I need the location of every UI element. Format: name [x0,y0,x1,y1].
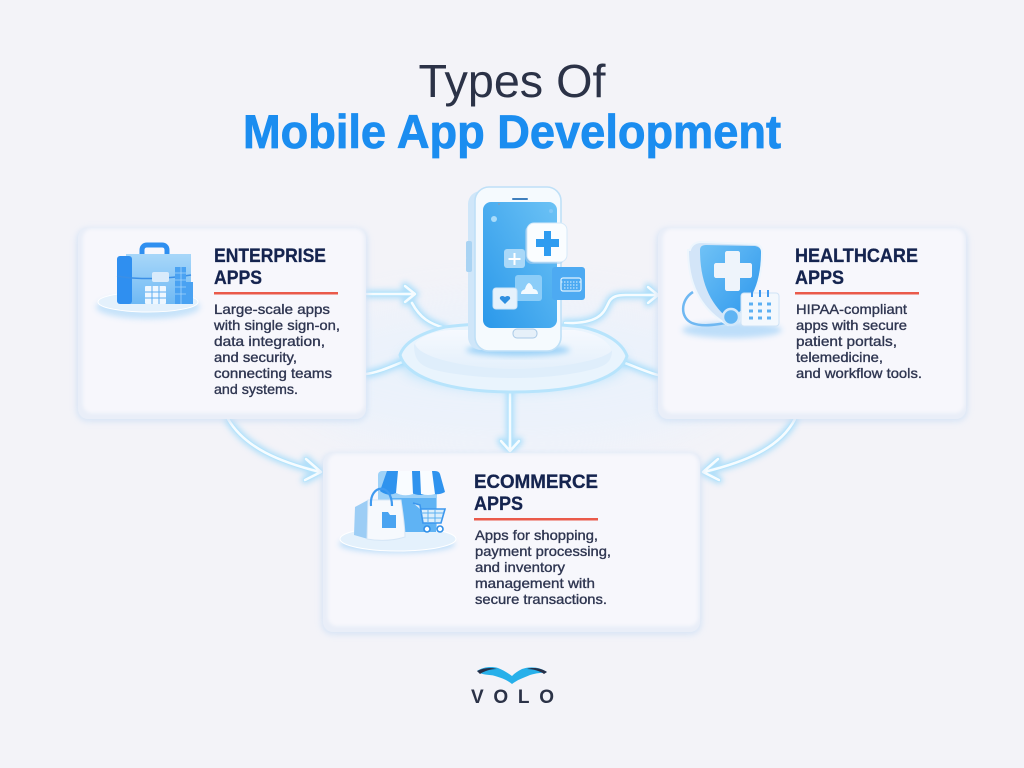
title line: Types Of: Types Of [418,55,606,107]
icon: smartphone [466,187,585,351]
body text: connecting teams [214,365,332,381]
body text: and workflow tools. [796,365,922,381]
body text: Apps for shopping, [475,527,598,543]
panel: enterprise apps [76,228,368,422]
heading: APPS [474,493,523,515]
body text: with single sign-on, [213,317,340,333]
body text: and security, [214,349,297,365]
platform [400,323,627,392]
heading [795,245,918,289]
body text: apps with secure [796,317,907,333]
heading: APPS [795,267,844,289]
body text [475,527,611,607]
icon: briefcase [96,245,200,319]
heading: ECOMMERCE [474,471,598,493]
body text: patient portals, [796,333,897,349]
heading: ENTERPRISE [214,245,326,267]
logo: Volo [471,667,554,708]
body text: management with [475,575,595,591]
app tile: calendar [552,267,585,300]
heading: HEALTHCARE [795,245,918,267]
logo wordmark: VOLO [471,687,554,708]
panel: ecommerce apps [321,453,702,635]
body text [796,301,922,381]
app tile: heart [493,288,517,309]
body text: HIPAA-compliant [796,301,907,317]
body text: and inventory [475,559,565,575]
panel: healthcare apps [656,228,968,422]
accent rule [795,292,919,294]
icon: shop, bag and cart [339,471,456,553]
body text: telemedicine, [796,349,883,365]
heading [474,471,598,515]
title line: Mobile App Development: Mobile App Development [243,105,781,158]
logo mark: wings [477,667,547,684]
icon: shield with calendar [682,242,782,338]
body text: secure transactions. [475,591,607,607]
body text: payment processing, [475,543,611,559]
body text: and systems. [214,381,298,397]
connector arrows [228,286,795,480]
heading [214,245,326,289]
body text: data integration, [214,333,325,349]
body text [213,301,340,397]
body text: Large-scale apps [214,301,330,317]
app tile: cloud [515,275,542,301]
accent rule [214,292,338,294]
heading: APPS [214,267,262,289]
app tile: plus [504,249,525,268]
accent rule [474,518,598,520]
title [243,55,781,158]
app tile: medical cross [525,223,567,264]
